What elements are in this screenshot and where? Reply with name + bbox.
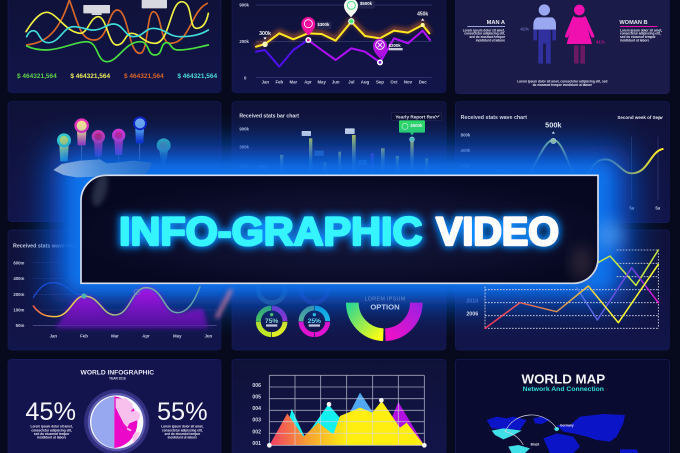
donut: 75% <box>258 308 285 335</box>
caption <box>517 80 607 87</box>
callout: 300k: 300k <box>259 31 271 37</box>
y axis labels <box>239 3 250 80</box>
lens flare streak <box>217 291 231 317</box>
donut: option <box>352 297 416 335</box>
y labels <box>252 383 261 447</box>
x axis labels: Mar <box>289 80 297 85</box>
grid <box>269 375 424 445</box>
donut: 25%: 25% <box>308 318 321 325</box>
text: man a: MAN A <box>487 20 505 26</box>
text: woman b: WOMAN B <box>619 20 648 26</box>
text: right: sed do eiusmod tempor <box>165 432 201 436</box>
pin: pink: $300k <box>317 22 330 27</box>
text: man a: consectetur adipiscing elit, <box>464 32 505 36</box>
y labels: 005 <box>252 394 261 400</box>
title: INFO-GRAPHIC <box>119 210 422 254</box>
x labels: Jun <box>204 334 213 339</box>
panel: man and woman <box>455 0 669 94</box>
caption: Lorem ipsum dolor sit amet, consectetur adipiscing elit, sed <box>517 80 607 84</box>
y labels: 400m <box>13 276 25 281</box>
heading: WORLD INFOGRAPHIC <box>81 370 154 377</box>
chart: cyan line <box>27 24 208 43</box>
donut: 75%: 75% <box>265 318 278 325</box>
text: woman b: incididunt ut labore <box>620 38 650 42</box>
map: glowing north america <box>53 159 152 177</box>
panel: monthly line chart <box>232 0 446 93</box>
line: green yellow <box>597 250 658 285</box>
pin: pink <box>301 17 331 43</box>
panel: wave lines top left <box>8 0 221 93</box>
badge: green <box>399 120 425 135</box>
chart: orange line <box>27 0 207 53</box>
line glow <box>256 20 429 45</box>
chart: wave over glow <box>33 287 208 328</box>
value: yellow: $ 464321,564 <box>70 73 110 80</box>
map: highlighted regions <box>492 427 559 453</box>
y labels: 900k <box>239 127 250 132</box>
tooltip <box>142 0 167 8</box>
text: woman b: consectetur adipiscing elit, <box>620 32 661 36</box>
panel: world infographic <box>8 359 221 453</box>
wave: orange yellow <box>33 287 200 317</box>
pin: blue <box>133 116 147 143</box>
pin: purple <box>373 39 403 65</box>
tag <box>302 131 311 136</box>
y labels <box>461 132 471 169</box>
panel: world map <box>455 359 669 453</box>
x axis labels: Feb <box>275 80 284 85</box>
heading: WORLD MAP <box>521 371 605 386</box>
y labels: 100k <box>239 163 250 168</box>
x axis labels: Nov <box>404 80 413 85</box>
percent: 45: 45% <box>25 398 76 426</box>
x labels <box>50 334 213 339</box>
y labels: 600m <box>13 260 25 265</box>
line: yellow <box>256 22 429 47</box>
panel: pins and map <box>8 102 221 222</box>
panel: wave chart left <box>8 230 221 350</box>
y labels: 006 <box>252 383 261 389</box>
value: cyan: $ 464321,564 <box>177 73 217 80</box>
text: left: Lorem ipsum dolor sit amet, <box>31 425 73 429</box>
text: man a <box>463 20 506 42</box>
pin: green <box>344 0 375 24</box>
wave <box>480 140 663 187</box>
percent: man: 41% <box>520 27 529 32</box>
x labels: Feb <box>80 334 88 339</box>
panel: area chart <box>232 359 446 453</box>
y labels: 50m <box>16 323 24 328</box>
percent: 55: 55% <box>157 398 208 426</box>
map: labels: Germany <box>560 423 574 427</box>
pin: peach <box>74 118 89 145</box>
chart: yellow line <box>26 2 208 45</box>
text: right: incididunt ut labore <box>168 436 197 440</box>
bars <box>280 135 428 179</box>
x axis labels: Dec <box>419 80 427 85</box>
dropdown label: Second week of Sep. <box>617 115 662 120</box>
y labels <box>13 260 25 328</box>
globe <box>84 389 149 453</box>
x labels: 5a <box>629 206 635 211</box>
heading: Received stats wave chart <box>461 115 527 121</box>
x axis labels: Jun <box>332 80 340 85</box>
callout: 500k: 500k <box>545 121 562 130</box>
panel: line chart <box>455 230 669 350</box>
text: left <box>31 425 73 440</box>
pin: cyan <box>57 133 71 161</box>
pin: green: $500k <box>360 1 373 6</box>
title: VIDEO <box>436 210 559 254</box>
text: man a: Lorem ipsum dolor sit amet, <box>463 28 505 32</box>
map: continents <box>487 414 638 453</box>
donut: 25% <box>301 308 328 335</box>
callout: 450k: 450k <box>417 12 428 18</box>
y axis labels: 200k <box>239 39 250 44</box>
text: man a: sed do eiusmod tempor <box>469 35 506 39</box>
markers <box>267 398 427 448</box>
badge: green: $500k <box>410 123 423 128</box>
x labels: Jan <box>50 334 57 339</box>
year label: 2010 <box>466 298 478 304</box>
icon: man <box>533 4 556 64</box>
point <box>410 137 414 142</box>
chart: lines over glow <box>466 250 658 328</box>
pin: violet <box>112 129 125 155</box>
value: green: $ 464321,564 <box>17 73 57 80</box>
subheading: Network And Connection <box>523 386 604 393</box>
x axis labels: Jul <box>348 80 354 85</box>
text: left: consectetur adipiscing elit, <box>31 428 72 432</box>
tooltip <box>83 5 110 15</box>
text: man a: incididunt ut labore <box>476 38 505 42</box>
callout: 450k <box>417 12 428 27</box>
point <box>81 293 87 299</box>
glow behind banner <box>50 147 630 303</box>
option value: OPTION <box>370 303 400 312</box>
line: blue magenta <box>577 268 658 320</box>
y labels: 300k <box>239 145 250 150</box>
panel: donuts <box>232 230 446 350</box>
tag <box>345 128 355 134</box>
line: red yellow <box>485 264 658 328</box>
bars: purple <box>371 153 374 177</box>
text: right: consectetur adipiscing elit, <box>162 428 203 432</box>
area: cyan <box>283 404 353 445</box>
dropdown <box>392 113 442 120</box>
y axis labels: 0 <box>244 75 247 80</box>
panel: bar chart <box>232 102 446 225</box>
pin lines <box>82 140 164 167</box>
y labels: 002 <box>252 429 261 435</box>
x labels: Mar <box>111 334 119 339</box>
x axis labels: Apr <box>304 80 312 85</box>
value boxes <box>258 151 367 170</box>
point <box>134 289 139 295</box>
value: orange: $ 464321,564 <box>124 73 164 80</box>
text: right: Lorem ipsum dolor sit amet, <box>161 425 204 429</box>
x labels <box>629 206 661 211</box>
text: left: sed do eiusmod tempor <box>34 432 70 436</box>
banner <box>81 172 598 283</box>
panel: wave chart right <box>455 102 669 223</box>
subheading: YEAR 2018 <box>109 377 126 381</box>
area: gradient <box>269 401 424 445</box>
chart: green line <box>27 42 208 62</box>
y labels: 100m <box>13 308 25 313</box>
x labels: 5a <box>655 206 661 211</box>
dotted grid <box>485 250 658 328</box>
callout: 300k <box>259 31 271 47</box>
y labels: 200k <box>461 164 471 169</box>
purple area <box>55 288 208 328</box>
x axis labels: Oct <box>390 80 398 85</box>
caption: do eiusmod tempor incididunt ut labore <box>533 83 592 87</box>
x axis labels: Aug <box>361 80 370 85</box>
vertical guides <box>632 137 658 200</box>
y labels: 200m <box>13 292 25 297</box>
icon: woman <box>567 5 593 64</box>
y labels: 800k <box>461 132 471 137</box>
x axis labels: Sep <box>376 80 384 85</box>
percent: woman: 41% <box>596 40 605 45</box>
option label: LOREM IPSUM <box>365 297 405 303</box>
y labels: 400k <box>461 148 471 153</box>
text: woman b: Lorem ipsum dolor sit amet, <box>620 28 662 32</box>
dropdown: Yearly Report Rev. <box>395 114 436 119</box>
pin: magenta <box>92 130 105 157</box>
x labels: Apr <box>142 334 150 339</box>
area: purple <box>380 402 424 445</box>
x labels: May <box>173 334 182 339</box>
grid <box>33 263 217 310</box>
light flare bottom right <box>596 221 624 249</box>
faded donuts <box>258 276 328 303</box>
y labels <box>239 127 250 168</box>
text: woman b <box>619 20 662 42</box>
area: blue <box>333 393 393 445</box>
text: right <box>161 425 204 440</box>
x axis labels: May <box>317 80 326 85</box>
pin: teal <box>157 138 171 165</box>
wave: blue <box>33 283 83 298</box>
year label: 2006 <box>466 312 478 318</box>
heading: Received stats bar chart <box>239 114 299 120</box>
map: connection arcs <box>505 415 557 445</box>
y labels: 001 <box>252 441 261 447</box>
y labels: 004 <box>252 406 261 412</box>
y labels: 003 <box>252 418 261 424</box>
text: left: incididunt ut labore <box>37 436 67 440</box>
y axis labels: 900k <box>239 3 250 8</box>
corner sheen <box>89 172 111 208</box>
corner sheen <box>572 247 591 280</box>
x axis labels: Jan <box>262 80 269 85</box>
map: labels: Brazil <box>531 443 539 447</box>
heading: Received stats wave chart <box>13 243 80 249</box>
x axis labels <box>262 80 427 85</box>
text: woman b: sed do eiusmod tempor <box>620 35 656 39</box>
pin: purple: $200k <box>389 43 401 48</box>
line: purple <box>256 31 430 67</box>
callout: 500k <box>545 121 562 144</box>
map: labels <box>531 423 574 447</box>
